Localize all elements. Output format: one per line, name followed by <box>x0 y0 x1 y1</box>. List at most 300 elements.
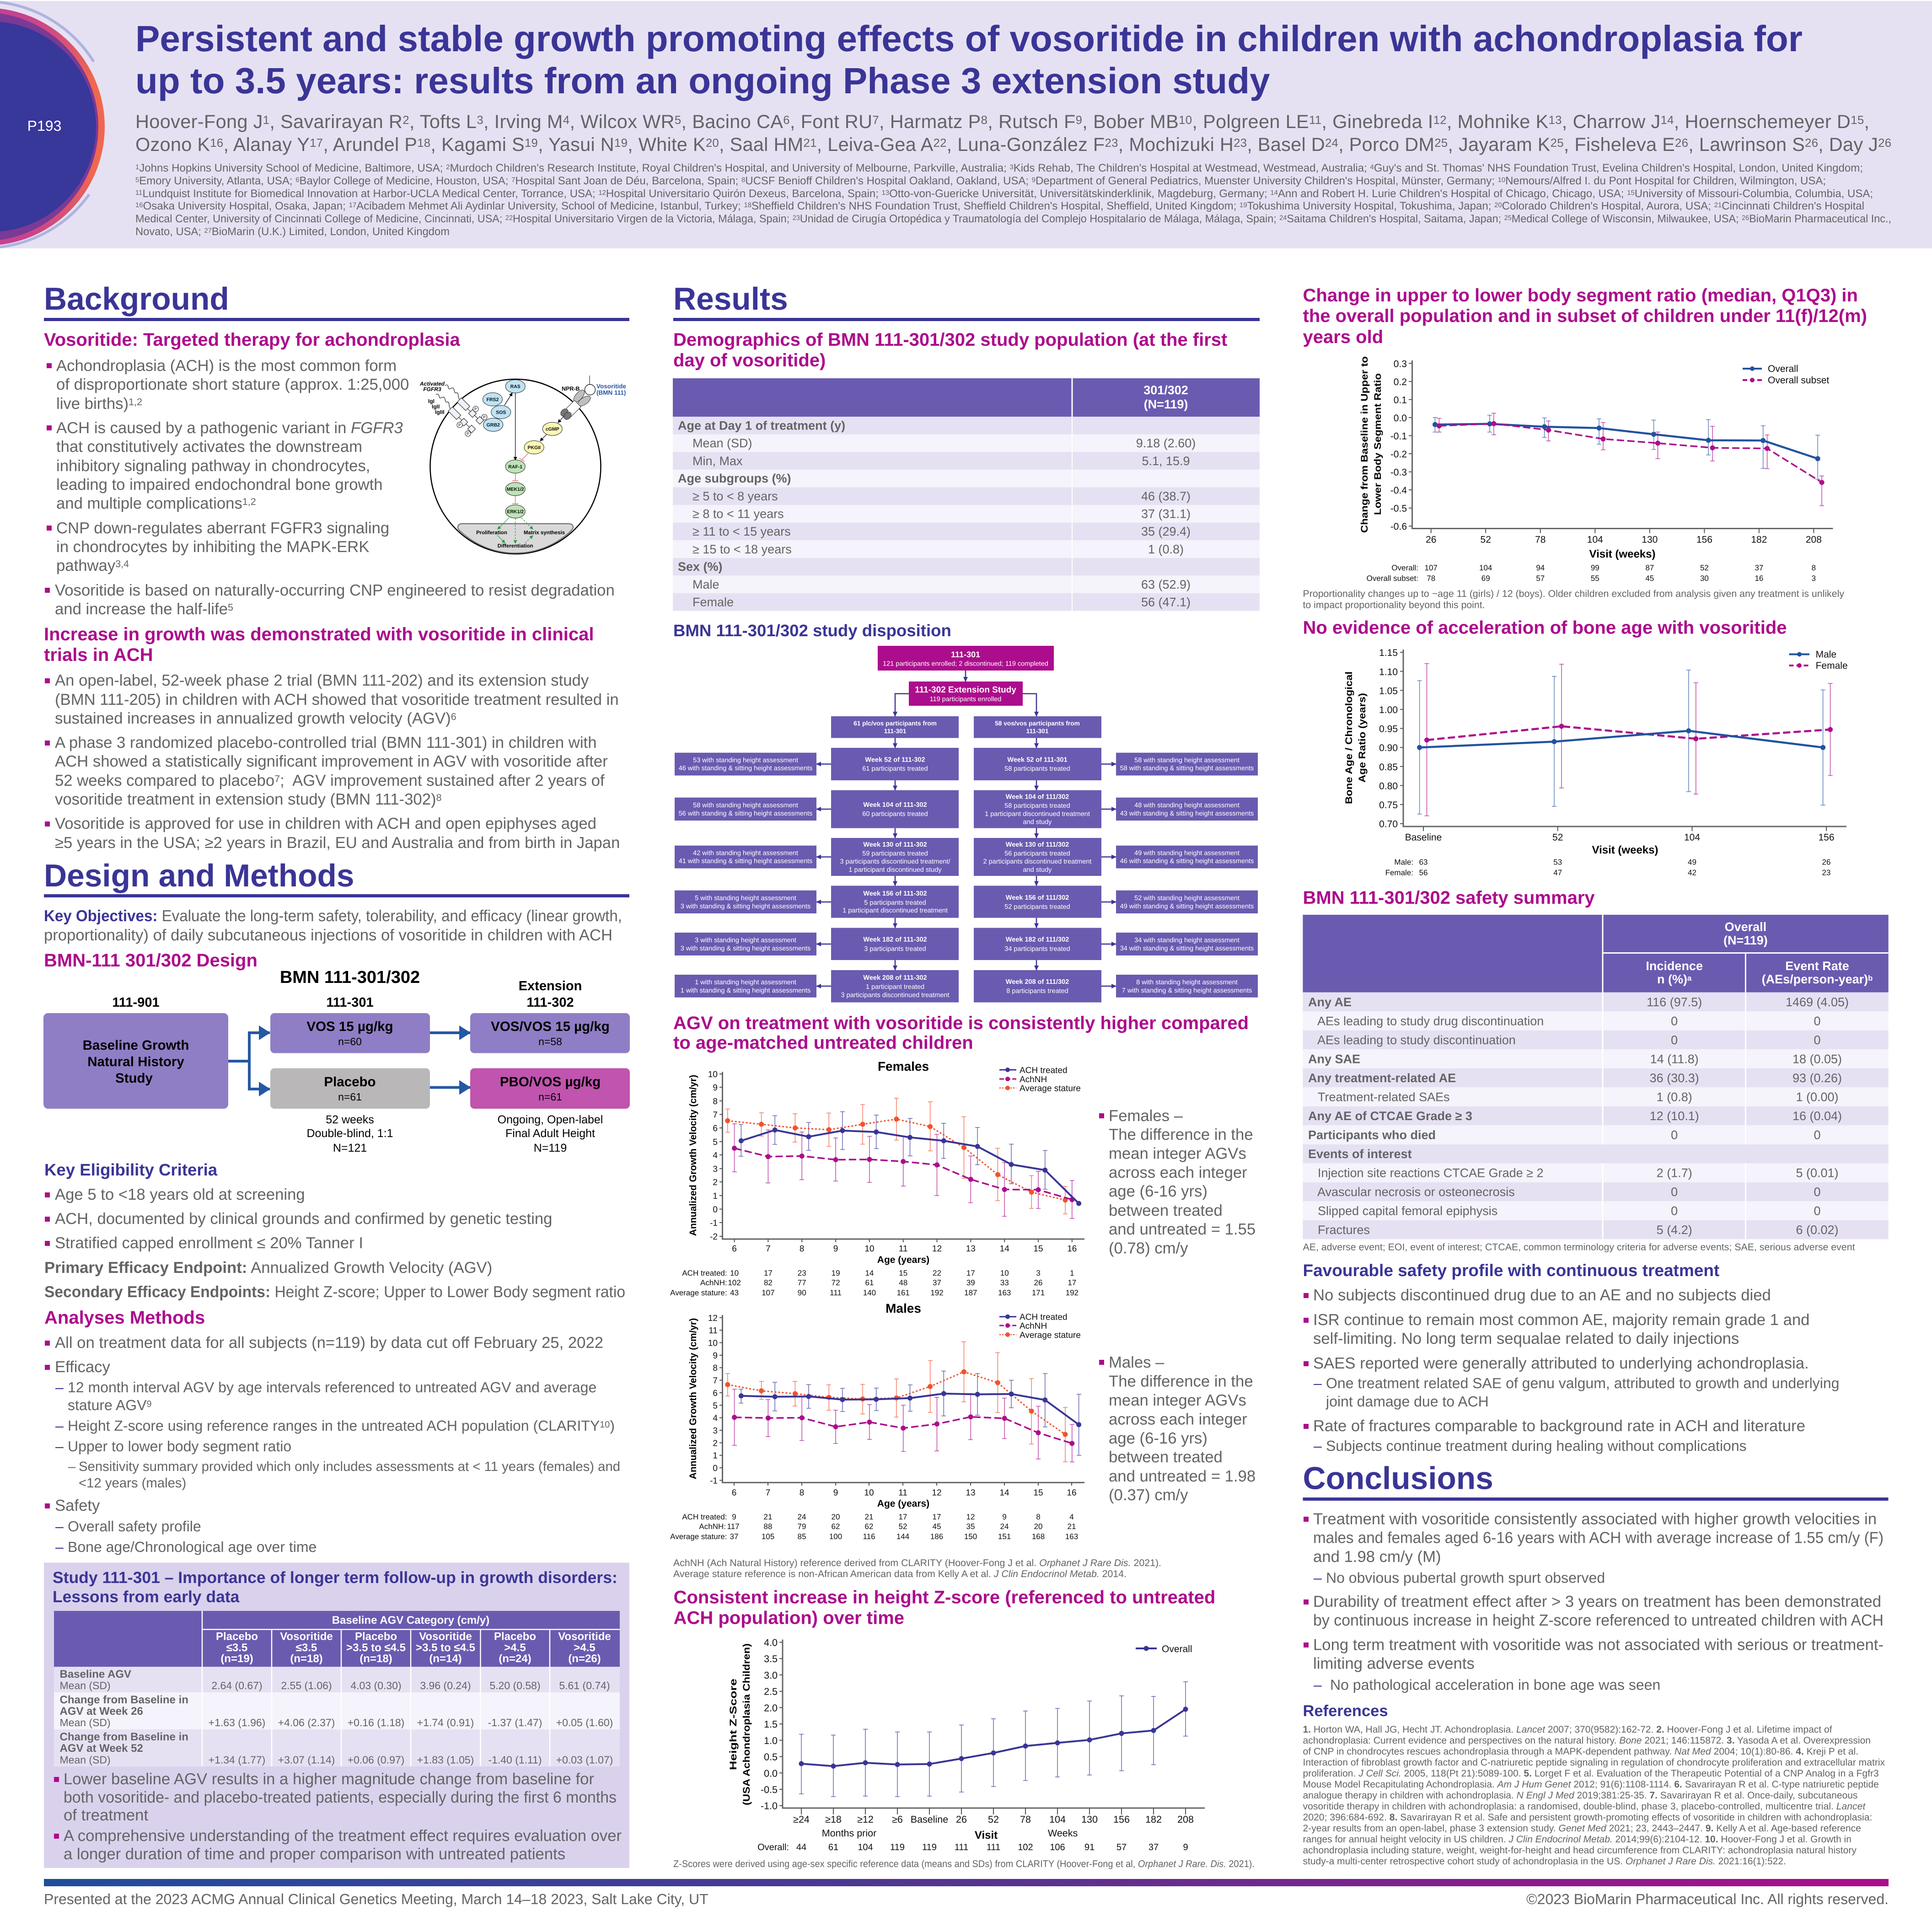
text: arm boxes: 1 participant discontinued treatment <box>985 810 1090 818</box>
text: assessment boxes: 42 with standing height assessment <box>693 850 798 857</box>
table: participants per visit: 49 <box>1688 858 1696 866</box>
diagram: FGFR3 and NPR-B signaling pathway in chondrocyte: Activated <box>419 381 445 387</box>
text block: analyses methods: Bone age/Chronological age over time <box>68 1539 317 1555</box>
text block: males difference: The difference in the <box>1109 1373 1253 1390</box>
table: females participants at risk: 26 <box>1034 1278 1042 1287</box>
table: demographics: 46 (38.7) <box>1141 489 1191 503</box>
table: participants per visit: 63 <box>1419 858 1428 866</box>
chart: males AGV by age: 10 <box>708 1338 718 1348</box>
text block: achondroplasia bullets: inhibitory signaling pathway in chondrocytes, <box>56 457 370 475</box>
box: VOS 15 <box>270 1013 430 1053</box>
text: arm boxes: 2 participants discontinued treatment <box>983 858 1091 865</box>
text: arm boxes: 1 participant discontinued treatment <box>843 907 948 914</box>
chart: upper to lower body segment ratio: 26 <box>1426 534 1436 545</box>
table: participants per visit: 52 <box>1700 564 1709 572</box>
text: assessment boxes: 1 with standing height assessment <box>695 979 796 986</box>
table: participants per visit: 106 <box>1050 1842 1065 1852</box>
text block: safety bullets <box>1304 1287 1839 1454</box>
table: females participants at risk: 3 <box>1036 1269 1041 1277</box>
diagram: FGFR3 and NPR-B signaling pathway in chondrocyte: Matrix synthesis <box>524 530 565 536</box>
text: assessment boxes: 3 with standing height assessment <box>695 937 796 944</box>
table: participants per visit: 104 <box>858 1842 873 1852</box>
legend: females: ACH treated <box>1020 1066 1068 1075</box>
text block: references: 2020; 396:684-692. 8. Savarirayan R et al. Safe and persistent growth-promoting effects of vosoritide in children with achondroplasia: <box>1303 1812 1872 1823</box>
table: baseline AGV category: +0.05 (1.60) <box>556 1717 613 1728</box>
chart: males AGV by age: 8 <box>713 1363 718 1373</box>
heading: Background <box>44 281 629 321</box>
table: demographics: Mean (SD) <box>692 436 752 450</box>
chart: height Z-score over time: Months prior <box>822 1828 876 1839</box>
text block: safety bullets: ISR continue to remain most common AE, majority remain grade 1 and <box>1313 1311 1809 1329</box>
chart: height Z-score over time: Weeks <box>1048 1828 1078 1839</box>
chart: males AGV by age: 4 <box>713 1414 718 1423</box>
table: females participants at risk: 33 <box>1000 1278 1009 1287</box>
heading: importance of longer term follow-up: Study 111-301 – Importance of longer term follow-up in growth disorders: <box>53 1568 617 1587</box>
text block: females difference: and untreated = 1.55 <box>1109 1221 1256 1238</box>
table: participants per visit: 78 <box>1427 574 1435 583</box>
table: demographics: 5.1, 15.9 <box>1142 454 1190 468</box>
text block: achondroplasia bullets: Achondroplasia (ACH) is the most common form <box>56 357 397 375</box>
legend: male and female <box>1789 649 1848 671</box>
table: participants per visit <box>1385 858 1830 877</box>
footnote: Z-scores: Z-Scores were derived using age-sex specific reference data (means and SDs) from CLARITY (Hoover-Fong et al, Orphanet J Rare. Dis. 2021). <box>673 1858 1255 1869</box>
table: females participants at risk: 107 <box>762 1288 775 1297</box>
heading: Design and Methods <box>44 858 629 897</box>
table: females participants at risk: 111 <box>830 1288 842 1297</box>
table: safety summary: Any AE of CTCAE Grade ≥ 3 <box>1308 1109 1472 1123</box>
table: participants per visit: 104 <box>1479 564 1492 572</box>
chart: males AGV by age: 6 <box>732 1488 736 1497</box>
text block: achondroplasia bullets: Vosoritide is based on naturally-occurring CNP engineered to resist degradation <box>55 582 615 599</box>
text block: females difference: The difference in the <box>1109 1126 1253 1143</box>
heading: Results <box>673 281 1260 321</box>
text block: analyses methods: Height Z-score using reference ranges in the untreated ACH population (CLARITY10) <box>68 1417 615 1434</box>
text block: references: Mouse Model Recapitulating Achondroplasia. Am J Hum Genet 2012; 91(6):1108-1114. 6. Savarirayan R et al. C-type natriuretic peptide <box>1303 1779 1879 1790</box>
chart: females AGV by age: 7 <box>713 1111 718 1120</box>
chart: bone age ratio: 1.05 <box>1379 686 1398 696</box>
box: VOS 15: VOS 15 µg/kg <box>306 1019 393 1034</box>
box: baseline natural history <box>43 1013 228 1109</box>
table: safety summary: Treatment-related SAEs <box>1318 1090 1450 1104</box>
chart: upper to lower body segment ratio: -0.6 <box>1390 521 1407 532</box>
chart: females AGV by age <box>670 1059 1084 1297</box>
text block: females difference: Females – <box>1109 1107 1183 1125</box>
table: safety summary: 0 <box>1814 1204 1821 1218</box>
chart: height Z-score over time: ≥24 <box>793 1814 810 1825</box>
table: females participants at risk: 1 <box>1070 1269 1074 1277</box>
text block: references: proliferation. J Cell Sci. 2005, 118(Pt 21):5089-100. 5. Lorget F et al. Evaluation of the Therapeutic Potential of a CNP Analog in a Fgfr3 <box>1303 1768 1879 1779</box>
text block: conclusions: Durability of treatment effect after > 3 years on treatment has been demonstrated <box>1313 1593 1881 1610</box>
table: baseline AGV category: AGV at Week 52 <box>59 1742 143 1755</box>
text: arm boxes: 58 participants treated <box>1004 765 1070 773</box>
box: VOS/VOS <box>470 1013 630 1053</box>
table: baseline AGV category: (n=19) <box>220 1653 253 1665</box>
table: baseline AGV category: -1.40 (1.11) <box>488 1754 542 1766</box>
table: baseline AGV category: (n=24) <box>499 1653 531 1665</box>
chart: height Z-score over time: Visit <box>975 1829 998 1841</box>
table: safety summary: (AEs/person-year)b <box>1762 972 1873 986</box>
flowchart: study disposition <box>675 646 1258 1003</box>
text block: achondroplasia bullets: CNP down-regulates aberrant FGFR3 signaling <box>56 520 389 537</box>
diagram: study design flow: 111-301 <box>326 995 374 1010</box>
table: safety summary: Injection site reactions CTCAE Grade ≥ 2 <box>1318 1166 1544 1180</box>
table: participants per visit: 26 <box>1822 858 1830 866</box>
text block: achondroplasia bullets: and increase the half-life5 <box>55 601 233 618</box>
text block: achondroplasia bullets: that constitutively activates the downstream <box>56 438 362 456</box>
chart: height Z-score over time: -1.0 <box>761 1801 778 1812</box>
chart: bone age ratio: 1.15 <box>1379 648 1398 658</box>
footer: Presented at the 2023 ACMG Annual Clinical Genetics Meeting, March 14–18 2023, Salt Lake City, UT <box>44 1891 708 1907</box>
table: participants per visit: 9 <box>1183 1842 1188 1852</box>
affiliations: 11Lundquist Institute for Biomedical Innovation at Harbor-UCLA Medical Center, Torrance, USA; 12Hospital Universitario Quirón Dexeus, Barcelona, Spain; 13Otto-von-Guericke Universität, Universitätskinderklinik, Magdeburg, Germany; 14Ann and Robert H. Lurie Children's Hospital of Chicago, Chicago, USA; 15University of Missouri-Columbia, Columbia, USA; <box>135 188 1873 200</box>
table: safety summary: 14 (11.8) <box>1650 1052 1699 1066</box>
text: assessment boxes: 53 with standing height assessment <box>693 757 798 764</box>
table: baseline AGV category: +0.16 (1.18) <box>348 1717 404 1728</box>
chart: males AGV by age: 8 <box>800 1488 804 1497</box>
text block: analyses methods: Overall safety profile <box>68 1518 201 1535</box>
chart: females AGV by age: 5 <box>713 1138 718 1147</box>
table: participants per visit: 57 <box>1116 1842 1127 1852</box>
subheading: study disposition: BMN 111-301/302 study disposition <box>673 621 951 640</box>
subheading: increase in growth: Increase in growth was demonstrated with vosoritide in clinical <box>44 624 594 644</box>
chart: bone age ratio: Age Ratio (years) <box>1357 693 1368 783</box>
table: participants per visit: 107 <box>1425 564 1438 572</box>
diagram: FGFR3 and NPR-B signaling pathway in chondrocyte: (BMN 111) <box>596 389 626 396</box>
text: arm boxes: 1 participant discontinued study <box>848 866 942 874</box>
text block: achondroplasia bullets: in chondrocytes by inhibiting the MAPK-ERK <box>56 538 369 556</box>
table: males participants at risk: 117 <box>727 1522 740 1531</box>
table: participants per visit: 8 <box>1812 564 1816 572</box>
text: assessment boxes: 7 with standing & sitting height assessments <box>1122 987 1252 994</box>
text block: references <box>1303 1724 1885 1867</box>
text: arm boxes: Week 52 of 111-301 <box>1007 757 1068 764</box>
panel: background <box>44 281 629 852</box>
table: participants per visit: Overall: <box>1391 564 1418 572</box>
text block: conclusions: Long term treatment with vosoritide was not associated with serious or treatment- <box>1313 1637 1884 1654</box>
chart: males AGV by age: 6 <box>713 1389 718 1398</box>
table: males participants at risk: 151 <box>998 1532 1011 1541</box>
text: assessment boxes: 48 with standing height assessment <box>1134 802 1240 809</box>
table: baseline AGV category: Baseline AGV <box>59 1668 131 1680</box>
diagram: FGFR3 and NPR-B signaling pathway in chondrocyte: Proliferation <box>476 530 507 536</box>
table: baseline AGV category: Change from Baseline in <box>59 1694 188 1706</box>
chart: males AGV by age: 3 <box>713 1426 718 1436</box>
table: males participants at risk: 85 <box>798 1532 806 1541</box>
text block: safety bullets: joint damage due to ACH <box>1326 1393 1489 1410</box>
table: males participants at risk: 62 <box>832 1522 840 1531</box>
chart: females AGV by age: 6 <box>713 1124 718 1133</box>
table: participants per visit: 37 <box>1148 1842 1159 1852</box>
table: safety summary: 0 <box>1671 1185 1678 1199</box>
table: participants per visit: 30 <box>1700 574 1709 583</box>
text block: analyses methods <box>45 1334 620 1555</box>
text block: clinical trials bullets: (BMN 111-205) in children with ACH showed that vosoritide treatment resulted in <box>55 691 619 708</box>
table: females participants at risk: 10 <box>1000 1269 1009 1277</box>
affiliations: 5Emory University, Atlanta, USA; 6Baylor College of Medicine, Houston, USA; 7Hospital Sant Joan de Déu, Barcelona, Spain; 8UCSF Benioff Children's Hospital Oakland, Oakland, USA; 9Department of General Pediatrics, Muenster University Children's Hospital, Münster, Germany; 10Nemours/Alfred I. du Pont Hospital for Children, Wilmington, USA; <box>135 175 1826 187</box>
table: females participants at risk: 187 <box>964 1288 977 1297</box>
diagram: study design flow: Double-blind, 1:1 <box>306 1127 393 1140</box>
table: males participants at risk: 88 <box>764 1522 772 1531</box>
text: arm boxes: 3 participants treated <box>864 945 926 953</box>
table: safety summary: 2 (1.7) <box>1657 1166 1692 1180</box>
table: demographics: Male <box>692 578 719 591</box>
subheading: favourable safety profile: Favourable safety profile with continuous treatment <box>1303 1261 1719 1280</box>
diagram: FGFR3 and NPR-B signaling pathway in chondrocyte: FGFR3 <box>423 386 441 392</box>
chart: upper to lower body segment ratio <box>1359 356 1833 583</box>
diagram: study design flow: BMN 111-301/302 <box>280 968 420 987</box>
table: males participants at risk: 17 <box>899 1513 907 1521</box>
table: baseline AGV category: +0.06 (0.97) <box>348 1754 404 1766</box>
affiliations: 1Johns Hopkins University School of Medicine, Baltimore, USA; 2Murdoch Children's Research Institute, Royal Children's Hospital, and University of Melbourne, Parkville, Australia; 3Kids Rehab, The Children's Hospital at Westmead, Westmead, Australia; 4Guy's and St. Thomas' NHS Foundation Trust, Evelina Children's Hospital, London, United Kingdom; <box>135 162 1863 174</box>
heading: Design and Methods: Design and Methods <box>44 858 354 893</box>
chart: upper to lower body segment ratio: -0.5 <box>1390 504 1407 514</box>
box: 111-302 extension study <box>909 682 1023 706</box>
text block: safety bullets: – <box>1314 1375 1322 1391</box>
table: demographics: ≥ 5 to < 8 years <box>692 489 778 503</box>
chart: upper to lower body segment ratio: 130 <box>1642 534 1658 545</box>
table: females participants at risk: 163 <box>998 1288 1011 1297</box>
text block: key objectives: proportionality) of daily subcutaneous injections of vosoritide in children with ACH <box>44 927 612 944</box>
diagram: FGFR3 and NPR-B signaling pathway in chondrocyte: P <box>474 407 477 411</box>
table: baseline AGV category: -1.37 (1.47) <box>488 1717 542 1728</box>
chart: females AGV by age: 8 <box>800 1244 804 1254</box>
chart: height Z-score over time: ≥6 <box>892 1814 903 1825</box>
text block: males difference: (0.37) cm/y <box>1109 1487 1188 1504</box>
text: assessment boxes: 5 with standing height assessment <box>695 895 796 902</box>
table: safety summary: Overall <box>1725 920 1766 934</box>
table: females participants at risk: 17 <box>764 1269 773 1277</box>
text: arm boxes: Week 130 of 111-302 <box>863 841 927 848</box>
diagram: FGFR3 and NPR-B signaling pathway in chondrocyte: P <box>458 423 461 427</box>
table: safety summary: 16 (0.04) <box>1792 1109 1842 1123</box>
table: females participants at risk: 192 <box>1066 1288 1079 1297</box>
table: baseline AGV category: Placebo <box>355 1630 397 1643</box>
text block: females difference <box>1099 1107 1256 1257</box>
diagram: FGFR3 and NPR-B signaling pathway in chondrocyte: IgII <box>432 403 440 410</box>
chart: bone age ratio: Bone Age / Chronological <box>1344 671 1354 804</box>
text: arm boxes: Week 52 of 111-302 <box>865 757 925 764</box>
text block: analyses methods: – <box>55 1539 64 1555</box>
table: participants per visit: 111 <box>955 1842 968 1852</box>
table: safety summary: 1 (0.00) <box>1796 1090 1839 1104</box>
table: demographics: 1 (0.8) <box>1148 542 1184 556</box>
text: arm boxes: Week 182 of 111/302 <box>1006 936 1069 944</box>
text: arm boxes: 56 participants treated <box>1004 850 1070 858</box>
chart: bone age ratio: Visit (weeks) <box>1592 844 1658 856</box>
subheading: bone age: No evidence of acceleration of bone age with vosoritide <box>1303 617 1787 638</box>
text block: safety bullets: Rate of fractures comparable to background rate in ACH and literature <box>1313 1417 1805 1435</box>
table: baseline AGV category: +0.03 (1.07) <box>556 1754 613 1766</box>
panel: right column results <box>1303 285 1889 1867</box>
box: 111-301: 121 participants enrolled; 2 discontinued; 119 completed <box>883 660 1048 668</box>
chart: males AGV by age: 11 <box>898 1488 907 1497</box>
text: assessment boxes: 58 with standing height assessment <box>1134 757 1240 764</box>
table: baseline AGV category: (n=18) <box>290 1653 323 1665</box>
text block: lessons: of treatment <box>64 1807 148 1824</box>
chart: males AGV by age <box>670 1301 1084 1541</box>
table: baseline AGV category: Placebo <box>494 1630 536 1643</box>
chart: height Z-score over time: (USA Achondroplasia Children) <box>741 1643 752 1805</box>
text: arm boxes: 111-301 <box>1026 728 1049 735</box>
chart: males AGV by age: 10 <box>864 1488 874 1497</box>
table: participants per visit: Overall: <box>757 1842 789 1852</box>
chart: bone age ratio: 0.90 <box>1379 743 1398 753</box>
footnote: safety abbreviations: AE, adverse event; EOI, event of interest; CTCAE, common terminology criteria for adverse events; SAE, serious adverse event <box>1303 1241 1855 1252</box>
chart: height Z-score over time: 78 <box>1020 1814 1031 1825</box>
text: assessment boxes <box>679 757 1254 994</box>
footnote: proportionality <box>1303 588 1844 610</box>
footnote: AGV references: AchNH (Ach Natural History) reference derived from CLARITY (Hoover-Fong J et al. Orphanet J Rare Dis. 2021). <box>673 1557 1161 1568</box>
heading: Results: Results <box>673 281 788 317</box>
text: arm boxes: Week 208 of 111-302 <box>863 974 927 982</box>
text block: references: analogue therapy in children with achondroplasia. N Engl J Med 2019;381:25-35. 7. Savarirayan R et al. Once-daily, subcutaneous <box>1303 1790 1857 1801</box>
text: assessment boxes: 49 with standing & sitting height assessments <box>1120 903 1254 910</box>
table: participants per visit: Female: <box>1385 868 1413 877</box>
table: females participants at risk: 72 <box>832 1278 840 1287</box>
text: arm boxes: 1 participant treated <box>866 983 924 991</box>
chart: upper to lower body segment ratio: 0.2 <box>1394 377 1407 387</box>
table: baseline AGV category: (n=14) <box>429 1653 462 1665</box>
table: females participants at risk: 17 <box>1068 1278 1076 1287</box>
table: demographics: (N=119) <box>1144 397 1188 411</box>
chart: height Z-score over time: ≥12 <box>857 1814 874 1825</box>
table: participants per visit: 44 <box>796 1842 806 1852</box>
chart: height Z-score over time: 104 <box>1049 1814 1066 1825</box>
chart: upper to lower body segment ratio: 182 <box>1751 534 1767 545</box>
diagram: study design flow: Final Adult Height <box>505 1127 595 1140</box>
table: males participants at risk: 21 <box>865 1513 873 1521</box>
table: demographics: 301/302 <box>1143 383 1188 397</box>
table: safety summary: 12 (10.1) <box>1650 1109 1699 1123</box>
text block: analyses methods: – <box>55 1379 64 1395</box>
table: males participants at risk: 186 <box>930 1532 943 1541</box>
chart: bone age ratio: 0.80 <box>1379 781 1398 791</box>
footer: ©2023 BioMarin Pharmaceutical Inc. All rights reserved. <box>1526 1891 1889 1907</box>
table: participants per visit: 99 <box>1591 564 1599 572</box>
text: arm boxes: Week 156 of 111-302 <box>863 890 927 897</box>
chart: females AGV by age: 10 <box>864 1244 874 1254</box>
table: safety summary: Slipped capital femoral epiphysis <box>1318 1204 1497 1218</box>
chart: bone age ratio: 0.95 <box>1379 724 1398 735</box>
chart: females AGV by age: -1 <box>710 1218 718 1228</box>
legend: overall and subset <box>1743 364 1829 386</box>
legend: females <box>999 1066 1081 1094</box>
table: males participants at risk <box>670 1513 1078 1541</box>
subheading: demographics: day of vosoritide) <box>673 350 826 370</box>
diagram: FGFR3 and NPR-B signaling pathway in chondrocyte: P <box>483 415 486 419</box>
chart: males AGV by age: Males <box>886 1301 921 1315</box>
footer <box>44 1879 1889 1907</box>
legend: females: Average stature <box>1020 1084 1081 1094</box>
chart: height Z-score over time: 3.5 <box>764 1653 778 1664</box>
affiliations: Novato, USA; 27BioMarin (U.K.) Limited, London, United Kingdom <box>135 225 450 238</box>
chart: females AGV by age: 16 <box>1067 1244 1077 1254</box>
table: safety summary: 0 <box>1671 1014 1678 1028</box>
table: demographics: 63 (52.9) <box>1141 578 1191 591</box>
chart: bone age ratio: 1.00 <box>1379 705 1398 715</box>
chart: males AGV by age: 9 <box>713 1351 718 1361</box>
table: demographics: 35 (29.4) <box>1141 525 1191 538</box>
text block: males difference: across each integer <box>1109 1411 1247 1428</box>
table: males participants at risk: 116 <box>863 1532 875 1541</box>
text: assessment boxes: 58 with standing height assessment <box>693 802 798 809</box>
table: females participants at risk: 77 <box>798 1278 806 1287</box>
table: participants per visit: 42 <box>1688 868 1696 877</box>
text: arm boxes: Week 208 of 111/302 <box>1006 978 1069 986</box>
subheading: AGV on treatment: to age-matched untreated children <box>673 1033 973 1053</box>
text block: achondroplasia bullets: ACH is caused by a pathogenic variant in FGFR3 <box>56 419 403 437</box>
table: males participants at risk: 8 <box>1036 1513 1041 1521</box>
text block: conclusions: and 1.98 cm/y (M) <box>1313 1548 1441 1566</box>
chart: males AGV by age: 16 <box>1067 1488 1077 1497</box>
table: participants per visit: 91 <box>1084 1842 1095 1852</box>
table: baseline AGV category: +1.83 (1.05) <box>417 1754 474 1766</box>
chart: females AGV by age: 8 <box>713 1097 718 1106</box>
chart: height Z-score over time: 0.5 <box>764 1752 778 1763</box>
table: males participants at risk: 105 <box>762 1532 774 1541</box>
diagram: FGFR3 and NPR-B signaling pathway in chondrocyte: IgIII <box>435 409 445 415</box>
table: baseline AGV category: +1.63 (1.96) <box>209 1717 265 1728</box>
text: assessment boxes: 46 with standing & sitting height assessments <box>1120 858 1254 865</box>
text block: lessons: both vosoritide- and placebo-treated patients, especially during the first 6 months <box>64 1789 617 1806</box>
chart: height Z-score over time: 182 <box>1145 1814 1162 1825</box>
chart: males AGV by age: -1 <box>710 1476 718 1486</box>
chart: bone age ratio: 1.10 <box>1379 667 1398 677</box>
text: assessment boxes: 3 with standing & sitting height assessments <box>681 945 810 952</box>
table: baseline AGV category: Mean (SD) <box>59 1717 111 1728</box>
table: males participants at risk: 52 <box>899 1522 907 1531</box>
table: baseline AGV category: 5.61 (0.74) <box>559 1680 610 1691</box>
chart: males AGV by age: 15 <box>1033 1488 1043 1497</box>
legend: overall: Overall <box>1162 1644 1192 1654</box>
text block: conclusions <box>1304 1511 1884 1693</box>
table: demographics: Min, Max <box>692 454 743 468</box>
legend: male and female: Male <box>1816 649 1836 660</box>
table: females participants at risk: 19 <box>832 1269 840 1277</box>
table: participants per visit: Male: <box>1394 858 1413 866</box>
table: safety summary: 18 (0.05) <box>1792 1052 1842 1066</box>
table: baseline AGV category: 2.64 (0.67) <box>211 1680 263 1691</box>
table: baseline AGV category: ≤3.5 <box>296 1642 317 1654</box>
text block: clinical trials bullets: sustained increases in annualized growth velocity (AGV)6 <box>55 710 456 727</box>
text: arm boxes: 61 plc/vos participants from <box>853 720 937 727</box>
chart: upper to lower body segment ratio: -0.1 <box>1390 431 1407 442</box>
diagram: study design flow: 111-901 <box>112 995 160 1010</box>
text: arm boxes: 58 participants treated <box>1004 802 1070 810</box>
text block: analyses methods: – <box>55 1438 64 1454</box>
table: participants per visit: 55 <box>1591 574 1599 583</box>
text block: analyses methods: Upper to lower body segment ratio <box>68 1438 291 1454</box>
text: assessment boxes: 8 with standing height assessment <box>1136 979 1238 986</box>
header banner <box>0 1 1932 248</box>
table: males participants at risk: 21 <box>764 1513 772 1521</box>
table: safety summary: 1469 (4.05) <box>1786 995 1849 1009</box>
chart: height Z-score over time: -0.5 <box>761 1784 778 1795</box>
table: females participants at risk: 23 <box>798 1269 806 1277</box>
text: arm boxes: and study <box>1023 866 1052 874</box>
box: placebo <box>270 1068 430 1109</box>
table: safety summary: 116 (97.5) <box>1647 995 1702 1009</box>
chart: males AGV by age: 11 <box>708 1326 718 1336</box>
chart: height Z-score over time: 0.0 <box>764 1768 778 1779</box>
chart: females AGV by age: 2 <box>713 1178 718 1187</box>
table: participants per visit: 56 <box>1419 868 1428 877</box>
table: participants per visit: 119 <box>890 1842 905 1852</box>
text block: females difference: between treated <box>1109 1202 1223 1219</box>
table: participants per visit: 45 <box>1645 574 1654 583</box>
subheading: height Z-score: ACH population) over time <box>674 1608 904 1628</box>
diagram: study design flow: 111-302 <box>526 995 574 1010</box>
